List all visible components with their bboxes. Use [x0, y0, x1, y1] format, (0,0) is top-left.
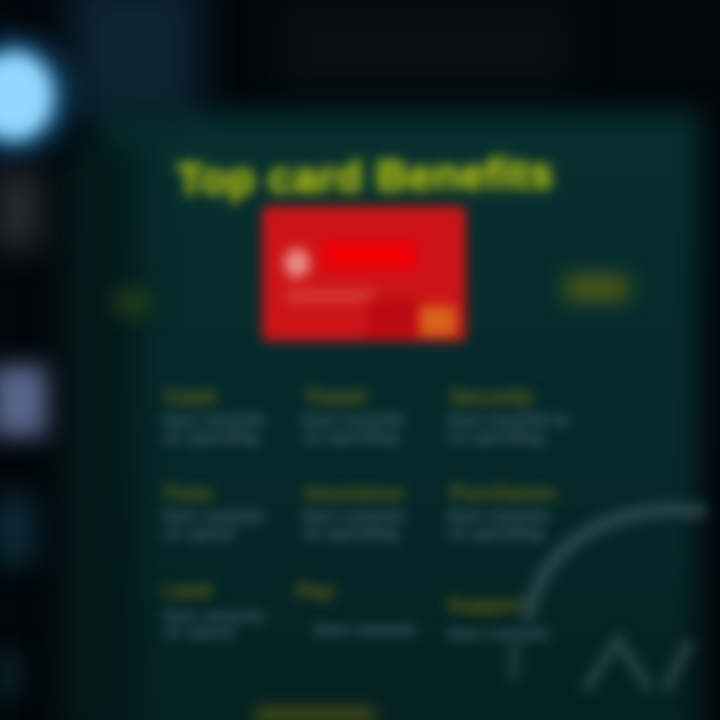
card white chip: [284, 248, 310, 278]
panel: dark teal board: [100, 112, 700, 720]
benefit r2c3: [446, 480, 560, 544]
benefit r3c2: [292, 578, 418, 640]
benefit r2c3: Purchases: [450, 482, 556, 505]
benefit r2c1: [160, 480, 265, 544]
benefit r3c3: Support: [447, 594, 527, 617]
benefit r1c3: [446, 385, 570, 448]
benefit r3c1: Limit: [162, 580, 212, 603]
title: Top card Benefits: [176, 149, 554, 204]
left side label: [115, 290, 151, 314]
benefit r1c1: [160, 385, 265, 448]
benefit r2c2: Earn rewards: [303, 508, 404, 525]
benefit r2c2: on spending: [303, 525, 398, 542]
benefit r2c3: Earn rewards: [448, 508, 549, 525]
card orange badge: [420, 306, 456, 336]
card logo text: [322, 240, 417, 270]
benefit r3c3: [444, 593, 550, 644]
benefit r3c1: [158, 579, 266, 643]
footer text: [255, 708, 375, 720]
benefit r2c1: Earn rewards: [163, 508, 264, 525]
card body: [262, 206, 466, 341]
benefit r1c2: Earn rewards: [303, 412, 404, 429]
benefit r1c1: Cash: [165, 386, 216, 409]
benefit r2c1: on spend: [163, 525, 234, 542]
panel shade: left side of board: [62, 140, 142, 720]
benefit r2c2: Insurance: [305, 482, 404, 505]
background top band: [280, 0, 570, 90]
benefit r1c3: on spending: [448, 429, 543, 446]
benefit r1c1: Earn rewards: [163, 412, 264, 429]
red credit card: [252, 196, 476, 350]
benefit r3c1: on spend: [163, 624, 234, 641]
emblem letter strokes: [585, 640, 690, 690]
benefit r2c1: Fees: [165, 482, 213, 505]
benefit r1c2: [300, 384, 405, 448]
benefit r3c2: Pay: [297, 580, 334, 603]
benefit r1c3: Security: [450, 386, 533, 409]
benefit r1c3: Earn rewards to: [448, 412, 569, 429]
benefit r1c1: on spending: [163, 429, 258, 446]
benefit r1c2: on spending: [303, 429, 398, 446]
gauge arc: [528, 510, 705, 620]
benefit r2c2: [300, 482, 408, 544]
benefit r1c2: Travel: [305, 386, 366, 409]
left light: bright blue circle: [0, 52, 53, 140]
left gray-blue blob: [0, 365, 47, 437]
benefit r2c3: on spending: [448, 525, 543, 542]
background top window glow: [70, 0, 200, 125]
icon: faint gauge emblem: [505, 499, 710, 692]
card dark shade: [367, 298, 417, 336]
card lower text: [287, 290, 377, 302]
benefit r3c1: Earn rewards: [163, 608, 264, 625]
left lower blob: [0, 650, 20, 700]
benefit r3c3: Earn rewards: [448, 626, 549, 643]
gauge lower arc: [513, 630, 520, 680]
left teal blob: [0, 495, 35, 565]
right side label: [565, 275, 629, 301]
left reddish-gray blob: [0, 170, 40, 250]
benefit r3c2: Earn rewards: [315, 622, 416, 639]
